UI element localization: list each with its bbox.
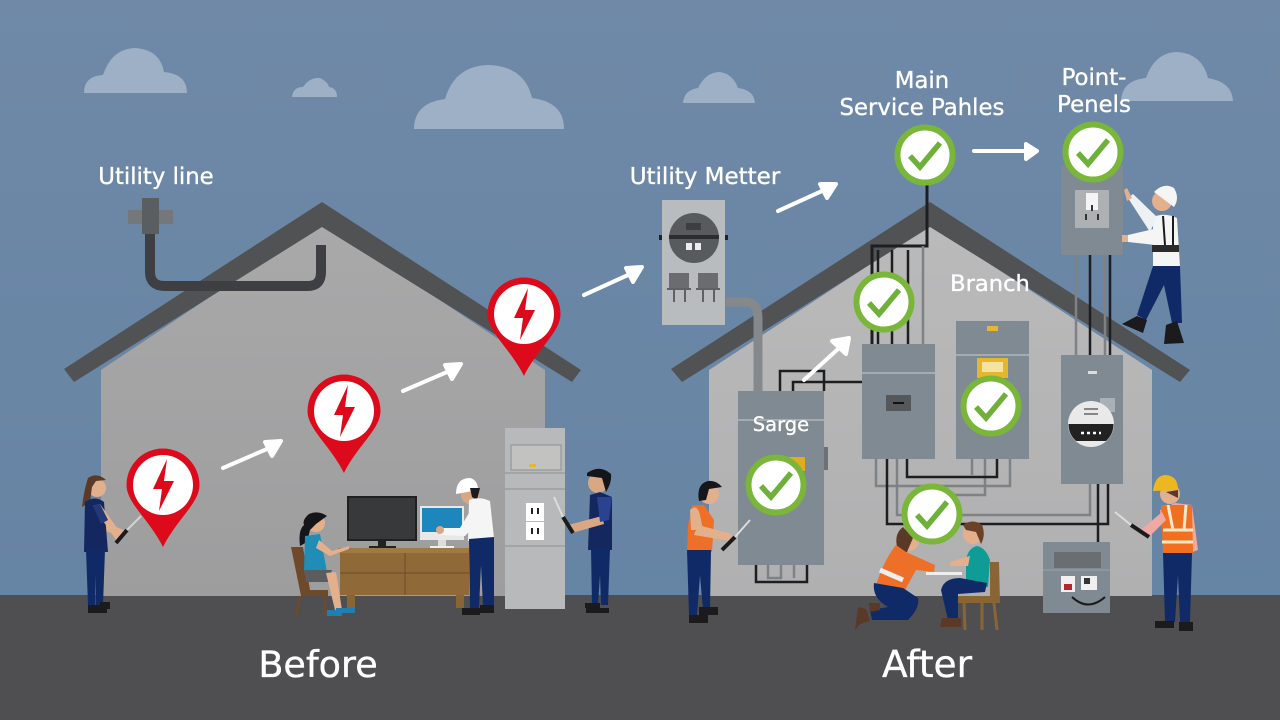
label: branch: Branch: [950, 271, 1030, 297]
white arrows: [223, 144, 1037, 468]
heading: after: After: [882, 642, 973, 686]
person: technician at desk: [436, 478, 494, 615]
panel: main: [862, 344, 935, 459]
utility line fixture: [128, 198, 321, 286]
ground: [0, 595, 1280, 720]
wiring: [756, 185, 1110, 582]
check: point: [1066, 124, 1120, 180]
label: surge: Sarge: [753, 413, 809, 436]
arrow 5: [974, 144, 1037, 159]
pin 2: [308, 374, 380, 473]
house: before: [64, 202, 581, 596]
utility meter box: [659, 200, 728, 325]
person: worker orange left: [687, 481, 750, 623]
panel: point: [1061, 165, 1123, 255]
cabinet: before: [505, 428, 565, 609]
panel: surge: [738, 391, 828, 565]
check: wiring: [904, 486, 960, 542]
desk with computer: [338, 497, 471, 608]
label: point panels: Penels: [1057, 92, 1131, 118]
arrow 1: [223, 441, 281, 468]
panel: lower unit: [1043, 542, 1110, 613]
person: worker orange right: [1115, 475, 1198, 631]
house: after: [671, 202, 1190, 596]
panel: smart meter: [1061, 355, 1123, 484]
people: seated pair: [855, 522, 1000, 630]
heading: before: Before: [258, 643, 378, 686]
arrow 3: [584, 267, 642, 295]
pin 1: [126, 448, 200, 547]
label: main service panels: Main: [895, 68, 949, 94]
check: surge: [748, 458, 804, 512]
person: woman left: [82, 475, 141, 613]
person: technician at cabinet: [554, 469, 612, 613]
check: main panel: [856, 274, 912, 330]
check: main service: [898, 128, 952, 182]
pin 3: [488, 278, 560, 376]
person: worker on roof: [1122, 186, 1184, 344]
arrow 2: [403, 364, 461, 391]
check: branch: [964, 378, 1018, 434]
arrow 6: [804, 338, 849, 380]
label: point panels: Point-: [1062, 65, 1126, 91]
clouds: [84, 48, 1233, 129]
label: main service panels: Service Pahles: [840, 95, 1004, 121]
label: utility meter: Utility Metter: [630, 164, 781, 190]
conduit from meter: [726, 302, 758, 392]
green checks: [748, 124, 1120, 542]
arrow 4: [778, 184, 836, 211]
label: utility line: Utility line: [98, 164, 214, 190]
person: seated woman: [291, 512, 355, 616]
panel: branch: [956, 321, 1029, 459]
red alert pins: [126, 278, 560, 547]
